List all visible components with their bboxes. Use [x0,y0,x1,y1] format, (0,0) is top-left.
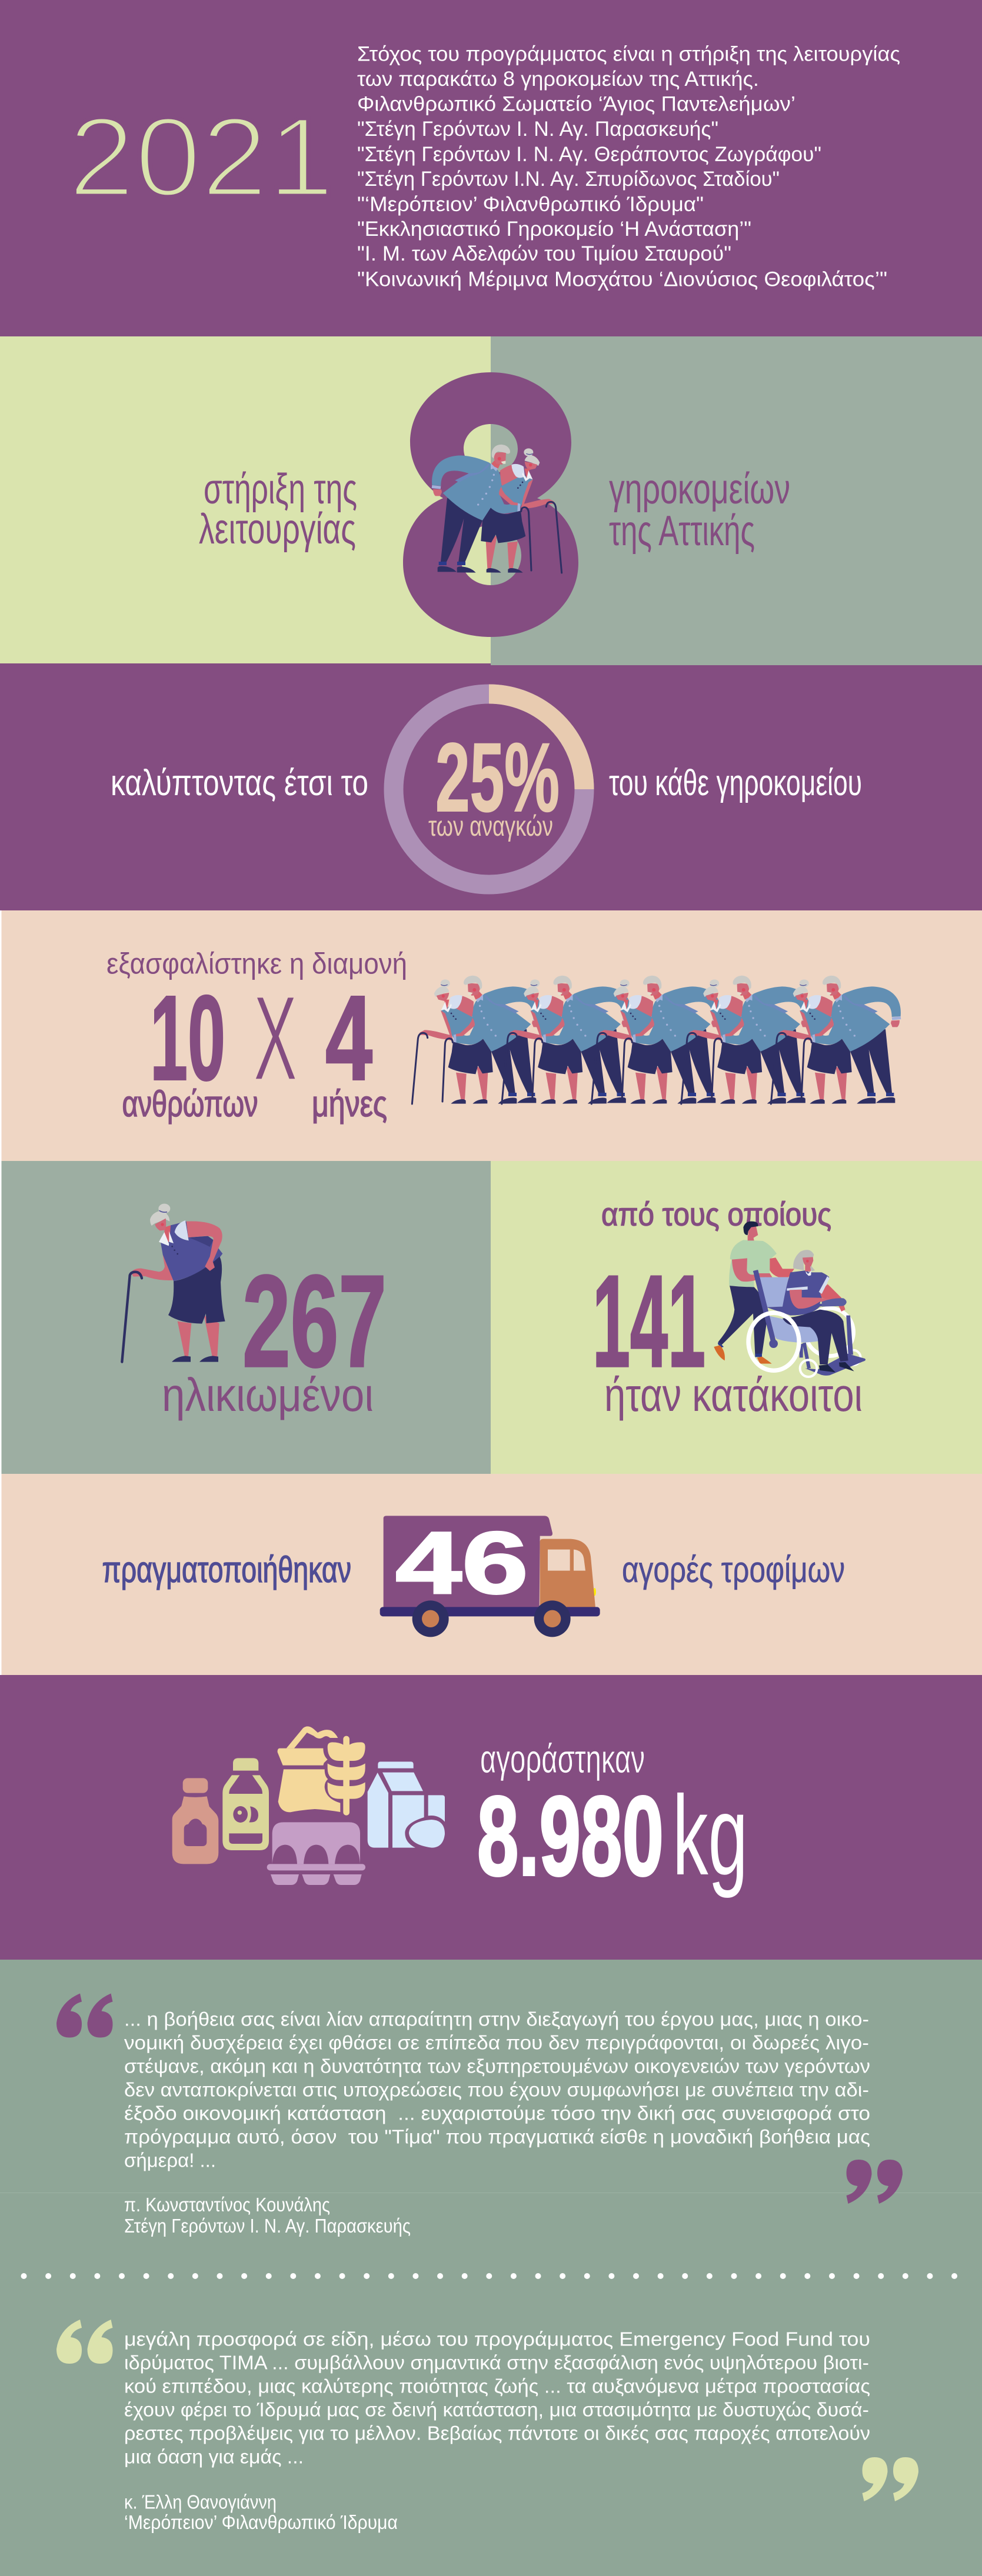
donut chart: 25% [394,694,584,885]
quote text: second testimonial: κού επιπέδου, μιας καλύτερης ποιότητας ζωής ... τα αυξανόμενα μέτρα προστασίας [124,2375,870,2397]
text block: programme goal and list of homes: "Κοινωνική Μέριμνα Μοσχάτου ‘Διονύσιος Θεοφιλάτος’" [357,268,887,291]
quote mark: closing green [863,2457,918,2501]
attribution: second testimonial: ‘Μερόπειον’ Φιλανθρωπικό Ίδρυμα [124,2511,398,2533]
value: 141: 141 [592,1249,705,1394]
text block: programme goal and list of homes: Φιλανθρωπικό Σωματείο ‘Άγιος Παντελεήμων’ [357,93,795,116]
text block: programme goal and list of homes: "Στέγη Γερόντων Ι. Ν. Αγ. Παρασκευής" [357,118,718,141]
quote text: second testimonial: μια όαση για εμάς ... [124,2445,304,2467]
icon: food products [172,1726,445,1885]
text block: programme goal and list of homes: "‘Μερόπειον’ Φιλανθρωπικό Ίδρυμα" [357,193,704,216]
quote text: first testimonial: πρόγραμμα αυτό, όσον του "Τίμα" που πραγματικά είσθε η μοναδική βοήθεια μας [124,2125,870,2147]
text: support of operation: λειτουργίας [199,506,356,553]
text: nursing homes of Attica: γηροκομείων [609,466,790,513]
heading: accommodation secured: εξασφαλίστηκε η διαμονή [106,947,407,980]
quote mark: opening green [56,2320,113,2364]
attribution: first testimonial: π. Κωνσταντίνος Κουνάλης [124,2194,330,2215]
text block: programme goal and list of homes: "Εκκλησιαστικό Γηροκομείο ‘Η Ανάσταση’" [357,218,751,241]
quote text: second testimonial: έχουν φέρει το Ίδρυμά μας σε δεινή κατάσταση, μια στασιμότητα με δυστυχώς δυσά- [124,2398,869,2421]
icon: sauce bottle [172,1778,218,1864]
text: nursing homes of Attica [609,466,790,555]
text block: programme goal and list of homes: "Στέγη Γερόντων Ι.Ν. Αγ. Σπυρίδωνος Σταδίου" [357,168,780,191]
value: 4 months: μήνες [312,1084,387,1125]
big number 8 [403,372,578,637]
attribution: second testimonial: κ. Έλλη Θανογιάννη [124,2491,277,2512]
label: of the needs: των αναγκών [428,811,553,842]
icon: delivery truck [380,1516,600,1637]
value: 10 people: ανθρώπων [122,1084,258,1125]
illustration: elderly couple [432,445,562,573]
value: 267: 267 [242,1249,387,1394]
attribution: second testimonial [124,2491,398,2533]
quote mark: closing purple [846,2160,903,2204]
value: 4 months: 4 [325,970,372,1106]
panel: accommodation [0,910,982,1675]
panel: testimonials [0,1960,982,2576]
multiply sign: X [254,972,297,1106]
text block: programme goal and list of homes: των παρακάτω 8 γηροκομείων της Αττικής. [357,68,759,91]
illustration: elderly woman with cane [122,1204,225,1362]
text: nursing homes of Attica: της Αττικής [609,508,755,555]
icon: egg carton [267,1822,365,1885]
text: of each home: του κάθε γηροκομείου [609,763,862,803]
quote text: first testimonial: στέψανε, ακόμη και η δυνατότητα των εξυπηρετουμένων οικογενειών των γερόντων [124,2056,870,2077]
text: support of operation: στήριξη της [204,466,357,513]
value: 10 people [122,970,258,1125]
quote mark: opening purple [56,1994,113,2037]
label: were bedridden: ήταν κατάκοιτοι [604,1369,863,1421]
icon: oil bottle [222,1758,269,1850]
text block: programme goal and list of homes: "Ι. Μ. των Αδελφών του Τιμίου Σταυρού" [357,242,731,265]
text: thus covering: καλύπτοντας έτσι το [111,763,368,803]
text block: programme goal and list of homes: "Στέγη Γερόντων Ι. Ν. Αγ. Θεράποντος Ζωγράφου" [357,143,821,166]
panel: 141 bedridden [491,1161,982,1474]
value: 10 people: 10 [150,970,225,1106]
panel: 267 elderly [1,1161,491,1474]
quote text: first testimonial: σήμερα! ... [124,2149,216,2171]
panel: 8980 kg purchased [0,1675,982,1960]
illustration: row of five couples [412,976,901,1104]
text: food purchases: αγορές τροφίμων [622,1550,845,1590]
quote text: first testimonial: δεν ανταποκρίνεται στις υποχρεώσεις που έχουν συμφωνήσει με συνέπεια την αδι- [124,2078,869,2101]
quote text: first testimonial: νομική δυσχέρεια έχει φθάσει σε επίπεδα που δεν περιγράφονται, οι δωρεές λιγο- [124,2032,869,2054]
quote text: second testimonial [124,2328,870,2467]
icon: flour sack and wheat [278,1726,365,1816]
attribution: first testimonial: Στέγη Γερόντων Ι. Ν. Αγ. Παρασκευής [124,2215,411,2237]
unit: kg: kg [673,1772,748,1898]
value: 25%: 25% [435,723,560,832]
quote text: second testimonial: ρεστες προβλέψεις για το μέλλον. Βεβαίως πάντοτε οι δικές σας παροχές αποτελούν [124,2422,870,2444]
value: 46: 46 [395,1513,528,1612]
text block: programme goal and list of homes: Στόχος του προγράμματος είναι η στήριξη της λειτουργίας [357,43,900,66]
quote text: first testimonial [124,2008,870,2171]
icon: milk carton and egg [368,1761,445,1848]
attribution: first testimonial [124,2194,411,2237]
quote text: second testimonial: μεγάλη προσφορά σε είδη, μέσω του προγράμματος Emergency Food Fund του [124,2328,870,2350]
illustration: carer pushing wheelchair [714,1222,866,1377]
panel: 46 food purchases [1,1474,982,1675]
quote text: first testimonial: ... η βοήθεια σας είναι λίαν απαραίτητη στην διεξαγωγή του έργου μας, μιας η οικο- [124,2008,869,2030]
quote text: second testimonial: ιδρύματος ΤΙΜΑ ... συμβάλλουν σημαντικά στην εξασφάλιση ενός υψηλότερου βιοτι- [124,2352,869,2374]
text block: programme goal and list of homes [357,43,900,291]
text: were purchased: αγοράστηκαν [480,1737,645,1781]
value: 8.980: 8.980 [477,1773,664,1899]
label: elderly: ηλικιωμένοι [162,1369,374,1421]
panel: support for 8 homes [0,336,982,665]
quote text: first testimonial: έξοδο οικονομική κατάσταση ... ευχαριστούμε τόσο την δική σας συνεισφορά στο [124,2102,870,2124]
year 2021: 2021 [68,94,334,220]
heading: of whom: από τους οποίους [601,1196,831,1232]
text: support of operation [199,466,357,553]
panel: intro [0,0,982,336]
text: carried out: πραγματοποιήθηκαν [102,1550,351,1590]
panel: 25 percent of needs [0,663,982,910]
value: 4 months [312,970,387,1125]
